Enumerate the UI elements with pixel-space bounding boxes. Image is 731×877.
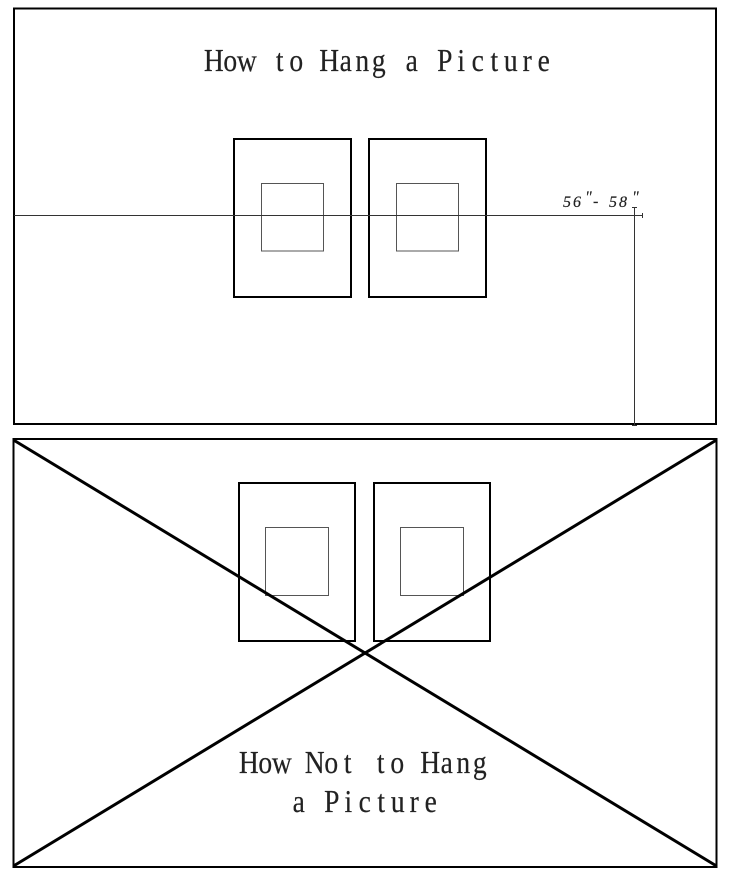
panel: how not to hang a picture: [14, 439, 716, 867]
right picture frame, too high: [374, 483, 490, 641]
heading: a picture: a Picture: [293, 784, 437, 820]
eye-level line: [14, 214, 643, 216]
right picture frame: [369, 139, 486, 297]
heading: how not to hang: How Not to Hang: [239, 745, 487, 781]
left picture frame: [234, 139, 351, 297]
heading: how to hang a picture: How to Hang a Picture: [204, 43, 550, 79]
dimension label: 56" - 58": [563, 189, 639, 211]
left picture frame, too high: [239, 483, 355, 641]
panel: how to hang a picture: [14, 8, 716, 426]
crossed-out X: [14, 440, 716, 866]
height dimension marker: [632, 207, 642, 426]
